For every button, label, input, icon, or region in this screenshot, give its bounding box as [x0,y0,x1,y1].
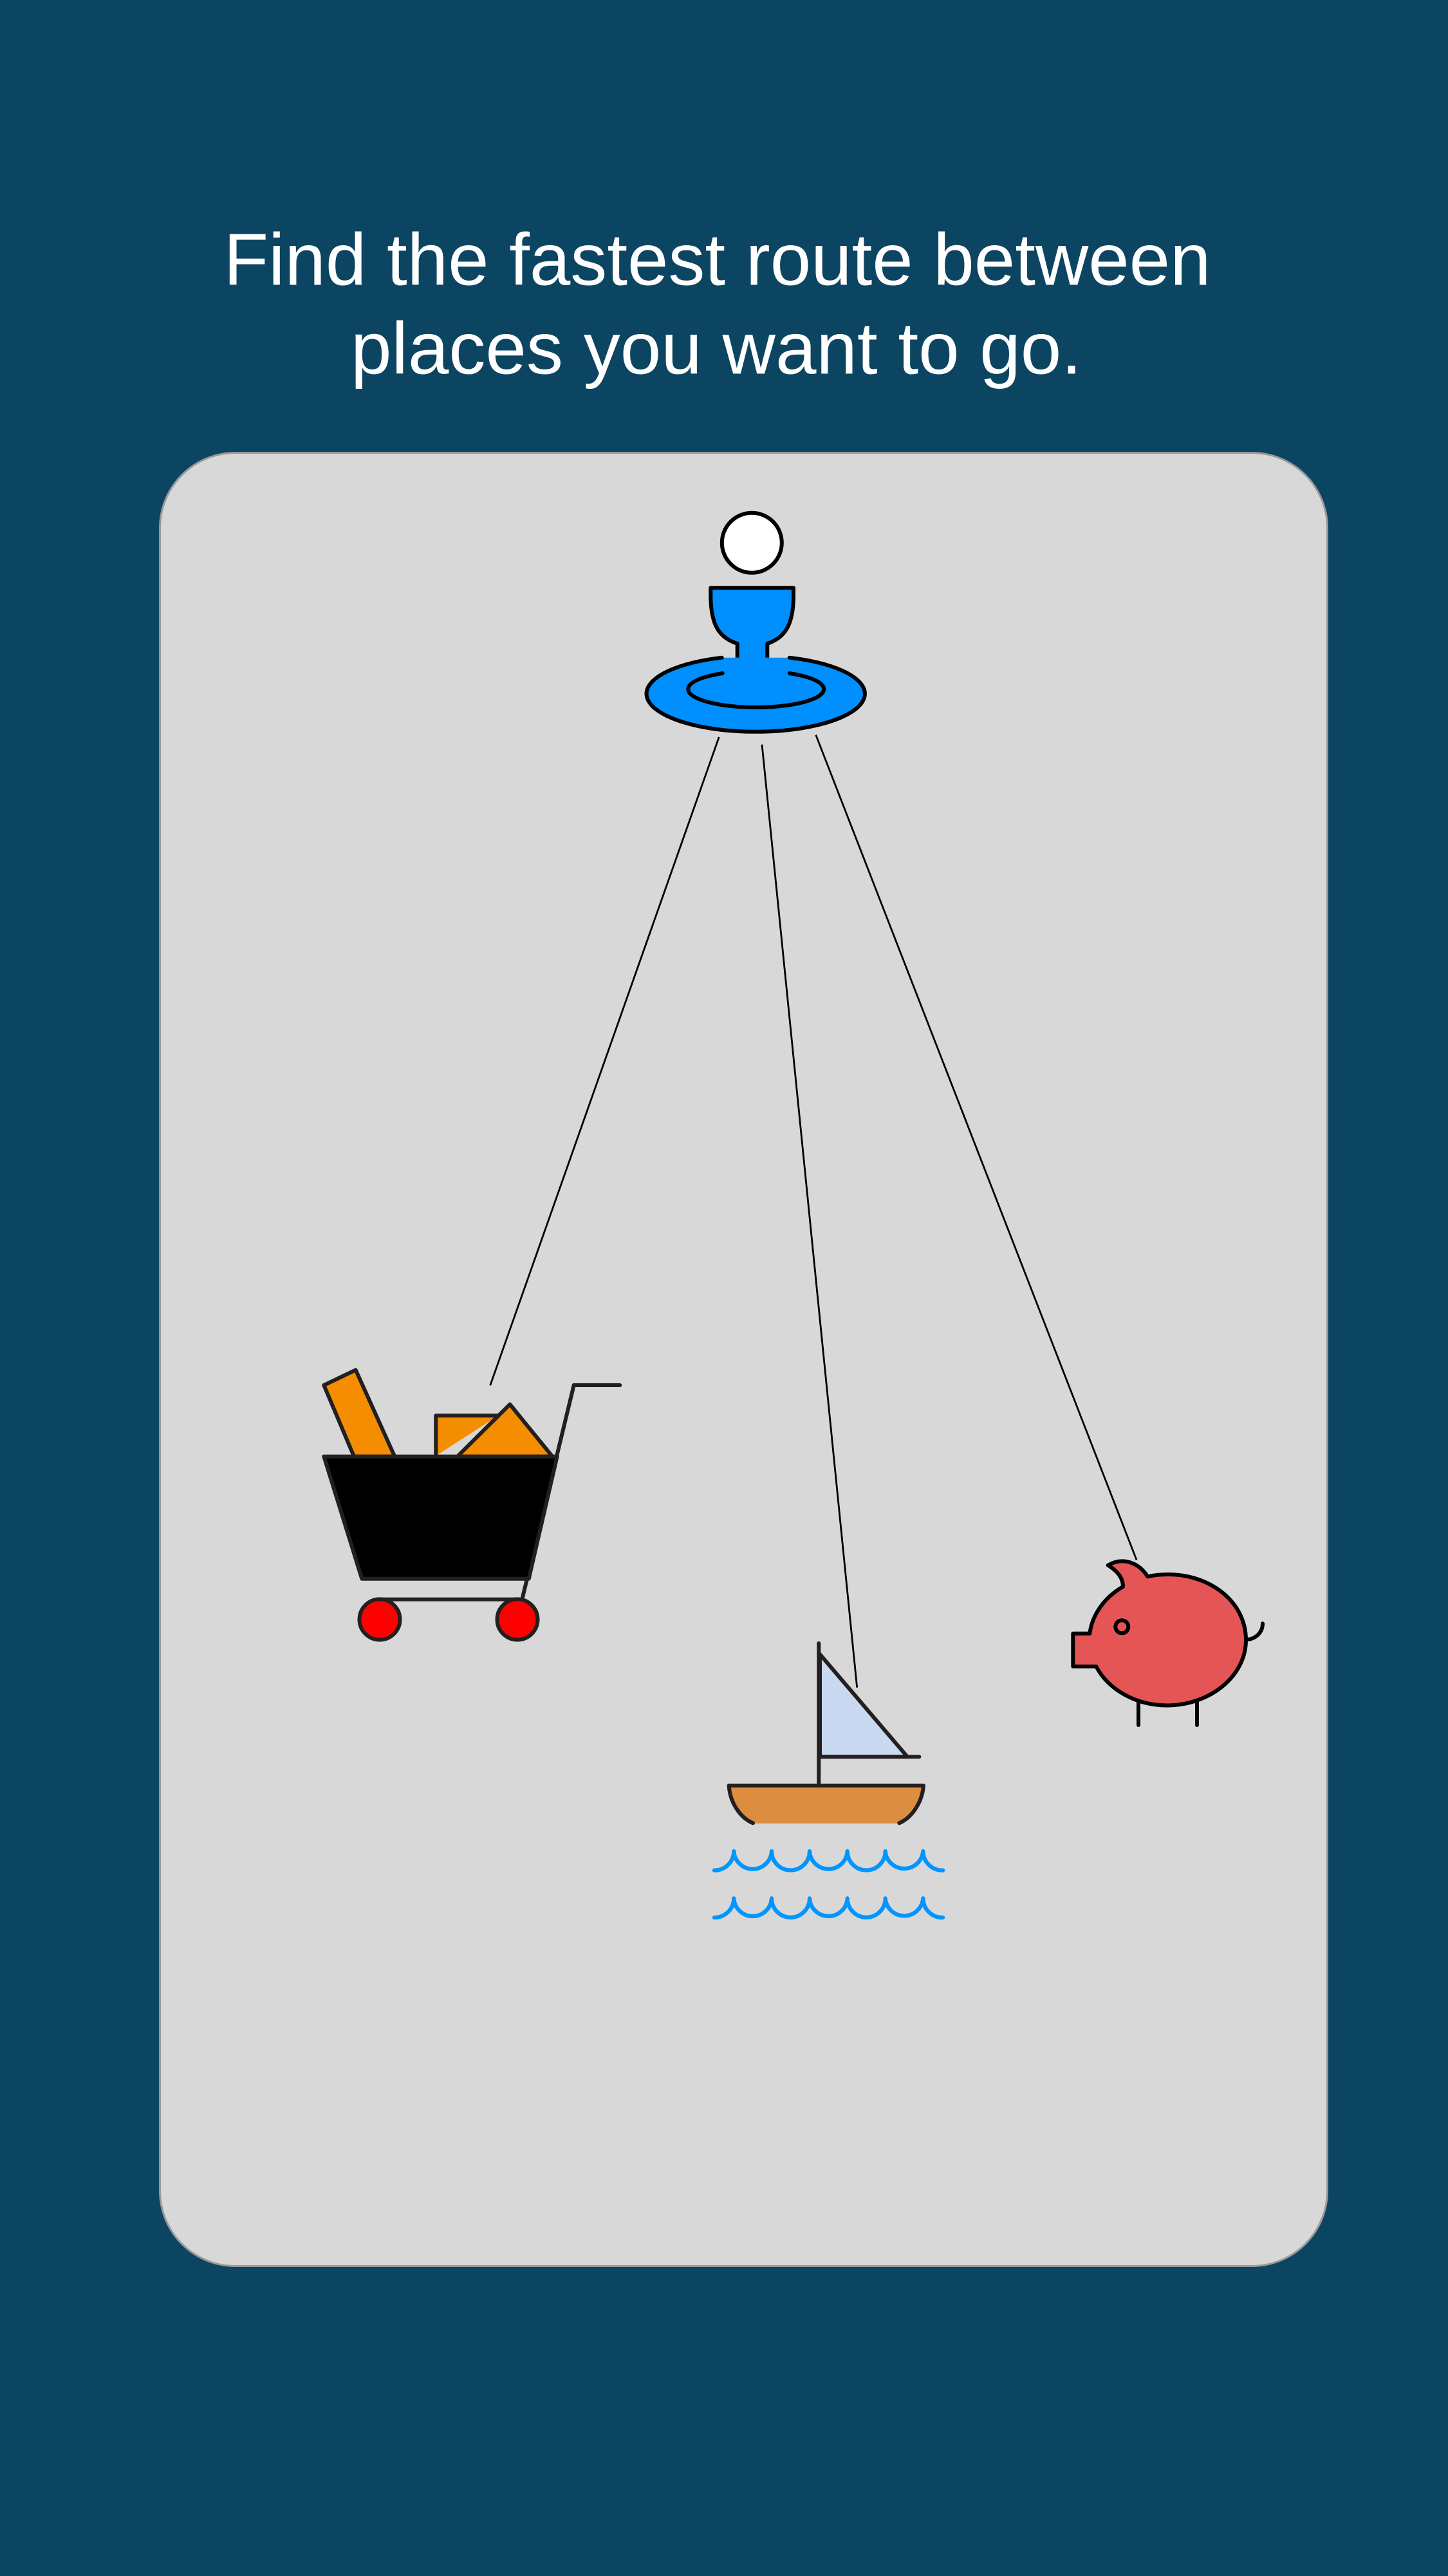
pig eye [1115,1620,1128,1633]
cart basket [324,1457,557,1579]
back leg [1195,1699,1199,1725]
long orange item [324,1370,394,1457]
outer ellipse base [647,658,865,732]
route line to sailboat [762,745,857,1688]
hull fill [729,1786,924,1824]
front leg [1137,1699,1140,1725]
orange box fill [438,1417,496,1455]
icon: shopping cart [324,1370,620,1640]
inner ellipse ring [688,673,824,707]
upper wave [714,1851,943,1871]
hull outline [729,1786,924,1823]
boom [819,1755,919,1759]
pig body [1073,1561,1246,1706]
panel: grey card [160,453,1327,2266]
right wheel [497,1599,538,1640]
title: places you want to go. [351,308,1082,390]
icon: sailboat [729,1643,924,1824]
route line to piggy bank [816,735,1137,1560]
sail [820,1654,907,1757]
goblet body [710,588,794,658]
title: Find the fastest route between [224,219,1211,301]
icon: piggy bank [1073,1561,1263,1725]
icon: water waves [714,1851,943,1918]
cart lower bar [380,1598,517,1601]
head circle [722,513,782,573]
cart handle and frame [523,1385,620,1598]
left wheel [359,1599,400,1640]
mast [817,1643,821,1785]
orange triangle item [458,1405,552,1457]
icon: person at origin location pin [647,513,865,732]
route line to shopping cart [490,737,719,1385]
tail [1246,1623,1263,1639]
title [224,219,1211,390]
lower wave [714,1898,943,1918]
orange box outline [436,1415,499,1456]
